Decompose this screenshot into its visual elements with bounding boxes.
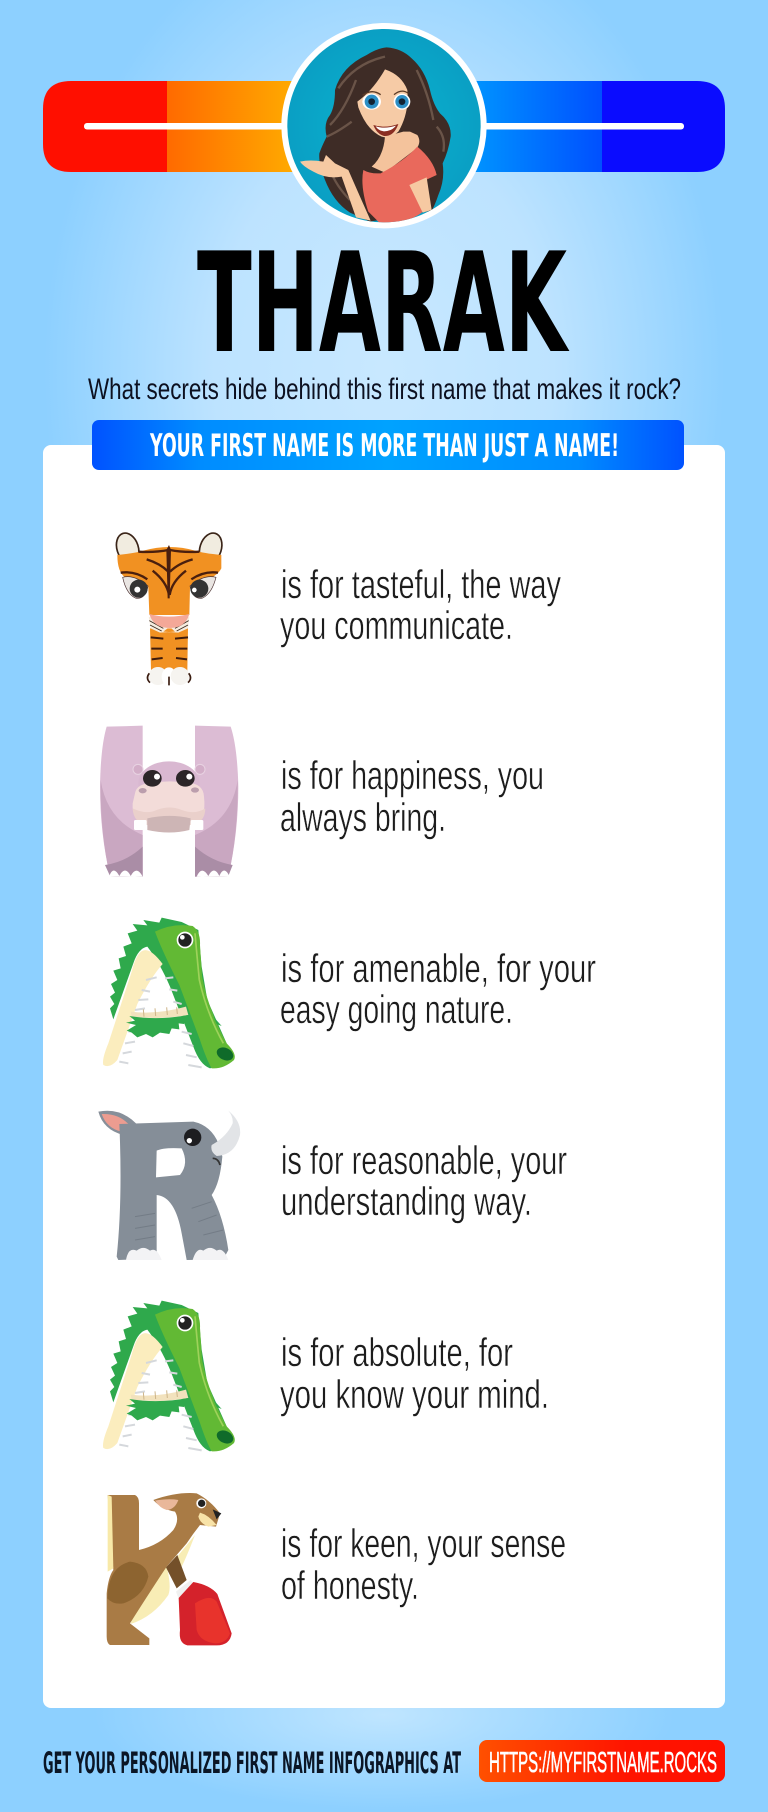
text: T line: is for tasteful, the way <box>281 563 561 607</box>
text: H line: is for happiness, you <box>281 754 544 798</box>
icon: hippo letter H <box>100 726 238 877</box>
panel: white content panel <box>43 445 725 1708</box>
icon: kangaroo letter K <box>107 1493 232 1645</box>
icon: rhino letter R <box>98 1111 240 1260</box>
icon: tiger letter T <box>113 530 226 686</box>
text: H line: always bring. <box>280 796 446 840</box>
text: second A line: is for absolute, for <box>281 1331 513 1375</box>
avatar: woman in circle <box>281 23 487 228</box>
icon: alligator letter A (second) <box>103 1301 235 1451</box>
icon: alligator letter A <box>103 918 235 1068</box>
banner <box>92 420 684 470</box>
text: A line: easy going nature. <box>280 988 513 1032</box>
text: K line: is for keen, your sense <box>281 1522 566 1566</box>
footer link button <box>479 1740 725 1782</box>
header colour bar <box>43 81 725 172</box>
text: R line: is for reasonable, your <box>281 1139 567 1183</box>
text: K line: of honesty. <box>281 1564 419 1608</box>
text: R line: understanding way. <box>281 1180 532 1224</box>
text: A line: is for amenable, for your <box>281 947 596 991</box>
text: T line: you communicate. <box>280 604 513 648</box>
text: second A line: you know your mind. <box>280 1373 549 1417</box>
